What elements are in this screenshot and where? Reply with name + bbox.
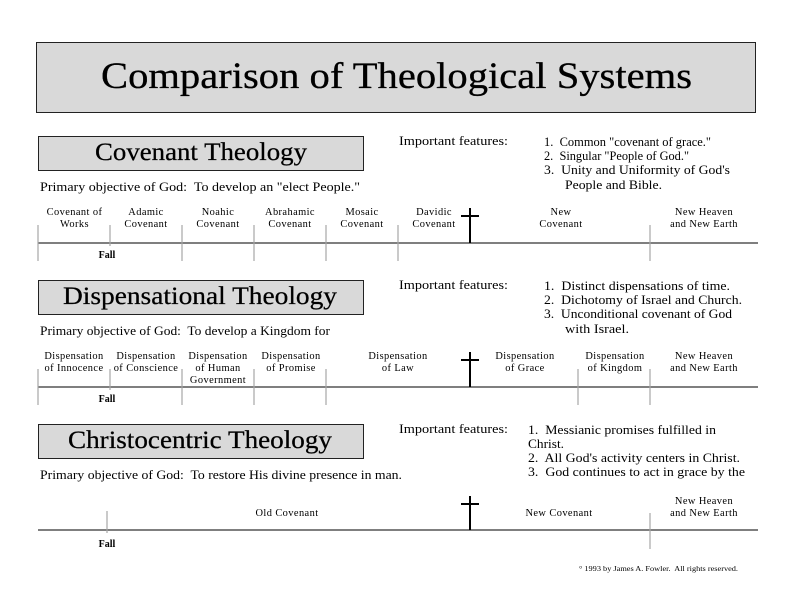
timeline: dispensational: of Human xyxy=(195,363,241,374)
important features: dispensational: 3. Unconditional covenant of God xyxy=(544,307,733,321)
timeline: christocentric: and New Earth xyxy=(670,508,738,519)
timeline: covenant: Noahic xyxy=(202,207,234,218)
important features: christocentric: Christ. xyxy=(528,437,564,451)
timeline: dispensational: Government xyxy=(190,375,246,386)
important features: christocentric: 2. All God's activity centers in Christ. xyxy=(528,451,740,465)
important features: christocentric: Important features: xyxy=(399,422,508,436)
timeline: dispensational: of Innocence xyxy=(45,363,103,374)
timeline: dispensational: Dispensation xyxy=(188,351,248,362)
timeline: covenant: Fall xyxy=(99,250,116,261)
important features: covenant: People and Bible. xyxy=(565,178,662,192)
timeline: dispensational: Dispensation xyxy=(368,351,428,362)
timeline: covenant: Covenant xyxy=(196,219,240,230)
important features: dispensational: 1. Distinct dispensations of time. xyxy=(544,279,730,293)
important features: christocentric xyxy=(399,422,745,479)
heading: covenant theology: Covenant Theology xyxy=(95,139,308,166)
panel: dispensational theology xyxy=(38,278,758,405)
timeline: dispensational: of Law xyxy=(382,363,414,374)
important features: dispensational xyxy=(399,278,742,336)
timeline: dispensational xyxy=(38,351,758,405)
timeline: covenant: Covenant xyxy=(268,219,312,230)
important features: covenant xyxy=(399,134,730,192)
important features: christocentric: 1. Messianic promises fulfilled in xyxy=(528,423,717,437)
timeline: covenant xyxy=(38,207,758,261)
timeline: covenant: Covenant xyxy=(340,219,384,230)
timeline: covenant: Works xyxy=(60,219,89,230)
important features: dispensational: 2. Dichotomy of Israel and Church. xyxy=(544,293,742,307)
timeline: dispensational: Dispensation xyxy=(585,351,645,362)
timeline: dispensational: Dispensation xyxy=(44,351,104,362)
timeline: dispensational: Dispensation xyxy=(116,351,176,362)
important features: dispensational: Important features: xyxy=(399,278,508,292)
title: Comparison of Theological Systems xyxy=(101,56,692,97)
timeline: covenant: Covenant xyxy=(539,219,583,230)
timeline: dispensational: of Kingdom xyxy=(588,363,642,374)
heading: covenant theology xyxy=(38,136,364,170)
timeline: dispensational: Fall xyxy=(99,394,116,405)
timeline: covenant: New xyxy=(551,207,572,218)
timeline: covenant: Covenant xyxy=(124,219,168,230)
timeline: covenant: New Heaven xyxy=(675,207,733,218)
important features: dispensational: with Israel. xyxy=(565,322,629,336)
timeline: dispensational: New Heaven xyxy=(675,351,733,362)
heading: dispensational theology xyxy=(38,280,364,314)
title xyxy=(36,42,756,112)
heading: christocentric theology xyxy=(38,424,364,458)
heading: christocentric theology: Christocentric Theology xyxy=(68,427,333,454)
timeline: covenant: and New Earth xyxy=(670,219,738,230)
timeline: dispensational: of Conscience xyxy=(114,363,178,374)
timeline: christocentric: New Heaven xyxy=(675,496,733,507)
timeline: covenant: Adamic xyxy=(128,207,164,218)
timeline: christocentric: Fall xyxy=(99,539,116,550)
important features: covenant: 3. Unity and Uniformity of God's xyxy=(544,163,730,177)
timeline: christocentric: Old Covenant xyxy=(255,508,319,519)
timeline: covenant: Abrahamic xyxy=(265,207,315,218)
icon: cross xyxy=(461,352,479,387)
timeline: dispensational: and New Earth xyxy=(670,363,738,374)
timeline: dispensational: of Promise xyxy=(266,363,316,374)
icon: cross xyxy=(461,208,479,243)
primary objective: covenant: Primary objective of God: To develop an "elect People." xyxy=(40,180,360,194)
timeline: covenant: Davidic xyxy=(416,207,452,218)
important features: covenant: 2. Singular "People of God." xyxy=(544,149,689,163)
panel: covenant theology xyxy=(38,134,758,261)
heading: dispensational theology: Dispensational Theology xyxy=(63,283,338,310)
timeline: christocentric xyxy=(38,496,758,550)
timeline: dispensational: of Grace xyxy=(505,363,545,374)
timeline: covenant: Mosaic xyxy=(345,207,379,218)
timeline: dispensational: Dispensation xyxy=(261,351,321,362)
important features: covenant: 1. Common "covenant of grace." xyxy=(544,135,711,149)
important features: covenant: Important features: xyxy=(399,134,508,148)
important features: christocentric: 3. God continues to act in grace by the xyxy=(528,465,745,479)
panel: christocentric theology xyxy=(38,422,758,550)
copyright note: ° 1993 by James A. Fowler. All rights reserved. xyxy=(579,565,738,573)
icon: cross xyxy=(461,496,479,530)
primary objective: dispensational: Primary objective of God: To develop a Kingdom for xyxy=(40,324,331,338)
timeline: covenant: Covenant of xyxy=(47,207,102,218)
primary objective: christocentric: Primary objective of God: To restore His divine presence in man. xyxy=(40,468,402,482)
timeline: covenant: Covenant xyxy=(412,219,456,230)
timeline: dispensational: Dispensation xyxy=(495,351,555,362)
timeline: christocentric: New Covenant xyxy=(525,508,593,519)
